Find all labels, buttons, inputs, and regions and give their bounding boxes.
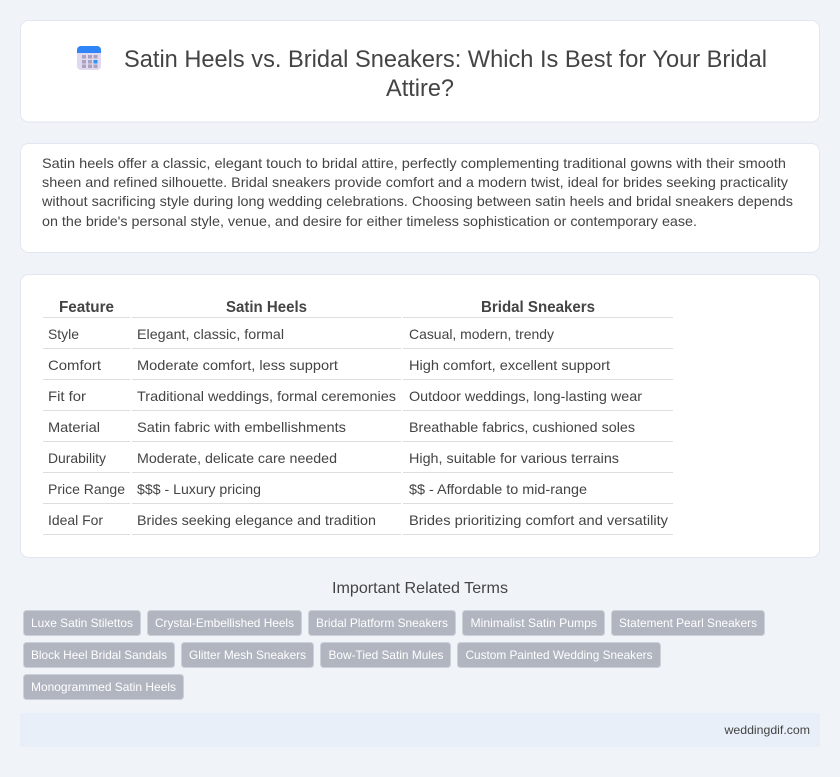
panel: introduction [20,144,820,252]
table header: Satin Heels [226,299,307,316]
row: style: Elegant, classic, formal [137,326,284,342]
row: style: Style [48,326,79,342]
row: durability: Moderate, delicate care needed [137,450,337,466]
row: material: Satin fabric with embellishments [137,419,346,435]
row: price range: $$$ - Luxury pricing [137,481,261,497]
row: comfort: High comfort, excellent support [409,357,610,373]
row: style [48,326,554,342]
row: durability [48,450,619,466]
row: fit for [48,388,642,404]
tag: Monogrammed Satin Heels [31,680,176,694]
row: ideal for: Brides prioritizing comfort and versatility [409,512,668,528]
intro text: sheen and refined silhouette. Bridal sneakers provide comfort and a modern twist, ideal for brides seeking practicality [42,174,788,190]
tag [612,610,764,636]
row: fit for: Fit for [48,388,86,404]
title: Satin Heels vs. Bridal Sneakers: Which Is Best for Your Bridal [124,46,767,73]
icon: calendar [77,46,101,70]
footer source text: weddingdif.com [723,723,810,737]
tag: Statement Pearl Sneakers [619,616,757,630]
row: durability: High, suitable for various terrains [409,450,619,466]
row: comfort: Moderate comfort, less support [137,357,338,373]
row: durability: Durability [48,450,106,466]
tag: Minimalist Satin Pumps [470,616,597,630]
tag: Luxe Satin Stilettos [31,616,133,630]
table header: Bridal Sneakers [481,299,595,316]
tag [24,610,140,636]
row: ideal for: Ideal For [48,512,103,528]
row: comfort [48,357,610,373]
related terms tags [24,610,764,700]
intro text: without sacrificing style during long wedding celebrations. Choosing between satin heels and bridal sneakers depends [41,193,793,209]
row: ideal for: Brides seeking elegance and tradition [137,512,376,528]
table header: Feature [59,299,114,316]
tag: Bow-Tied Satin Mules [328,648,444,662]
tag [308,610,456,636]
row: price range: $$ - Affordable to mid-range [409,481,587,497]
row: fit for: Outdoor weddings, long-lasting wear [409,388,642,404]
row: comfort: Comfort [48,357,101,373]
intro text: on the bride's personal style, venue, and desire for either timeless sophistication or contemporary ease. [42,213,697,229]
footer [20,713,820,747]
row: style: Casual, modern, trendy [409,326,554,342]
intro text: Satin heels offer a classic, elegant touch to bridal attire, perfectly complementing traditional gowns with their smooth [42,155,786,171]
tag [24,642,174,668]
tag: Bridal Platform Sneakers [316,616,448,630]
panel: comparison table [20,274,820,558]
tag: Glitter Mesh Sneakers [189,648,306,662]
tag [24,674,184,700]
row: price range: Price Range [48,481,125,497]
row: price range [48,481,587,497]
tag [458,642,660,668]
row: material: Breathable fabrics, cushioned soles [409,419,635,435]
row: material: Material [48,419,100,435]
panel: header [20,20,820,122]
tag [462,610,604,636]
tag [182,642,314,668]
table header [59,299,595,316]
related terms heading: Important Related Terms [332,580,508,597]
title: Attire? [386,75,454,102]
tag [148,610,302,636]
tag [320,642,450,668]
row: material [48,419,635,435]
tag: Custom Painted Wedding Sneakers [466,648,652,662]
row: fit for: Traditional weddings, formal ceremonies [137,388,396,404]
row: ideal for [48,512,668,528]
tag: Crystal-Embellished Heels [155,616,294,630]
tag: Block Heel Bridal Sandals [31,648,167,662]
